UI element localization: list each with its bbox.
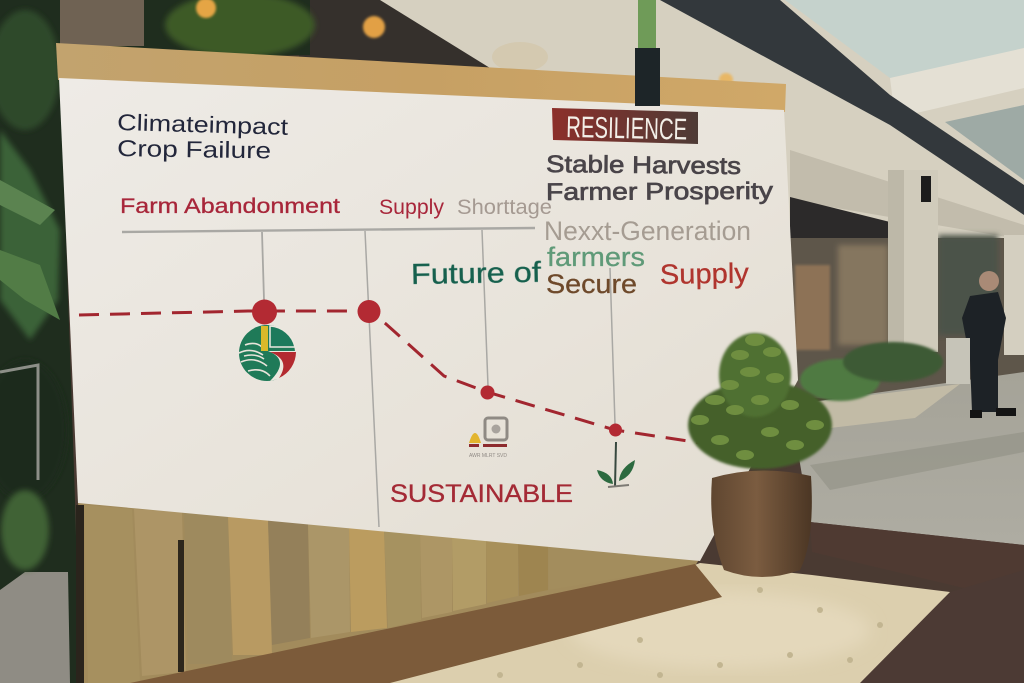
background shrubs bbox=[800, 338, 970, 401]
top wooden header plank bbox=[56, 43, 786, 112]
heading: future of: Future of bbox=[411, 257, 542, 291]
label: sustainable: SUSTAINABLE bbox=[390, 480, 573, 508]
label: farm abandonment and supply shortage: Farm Abandonment bbox=[120, 195, 340, 218]
rail and hanging bracket bbox=[635, 48, 660, 106]
banner: resilience: RESILIENCE bbox=[566, 111, 688, 147]
panel: white board bbox=[59, 78, 798, 561]
person in suit bbox=[962, 271, 1016, 418]
label: farm abandonment and supply shortage: Supply bbox=[379, 196, 444, 219]
icon: seed and sensor bbox=[469, 418, 507, 459]
planter stone pot bbox=[0, 490, 70, 683]
text: next-generation farmers, secure supply bbox=[544, 216, 751, 299]
chart: drop lines bbox=[122, 228, 615, 527]
chart: milestone dots bbox=[252, 300, 622, 436]
banner: resilience bbox=[552, 108, 698, 147]
text: next-generation farmers, secure supply: Nexxt-Generation bbox=[544, 216, 751, 246]
wooden plank base bbox=[76, 500, 722, 683]
text: stable harvests, farmer prosperity bbox=[546, 151, 773, 206]
text: next-generation farmers, secure supply: Supply bbox=[660, 257, 749, 290]
heading: climate impact bbox=[117, 109, 289, 163]
gravel bed bbox=[380, 563, 950, 683]
plant in terracotta pot bbox=[688, 333, 832, 577]
icon: sprout bbox=[597, 442, 635, 487]
label: farm abandonment and supply shortage bbox=[120, 195, 552, 219]
label: farm abandonment and supply shortage: Shorttage bbox=[457, 196, 552, 219]
heading: climate impact: Climateimpact bbox=[117, 109, 289, 140]
text: stable harvests, farmer prosperity: Farmer Prosperity bbox=[546, 178, 773, 206]
text: next-generation farmers, secure supply: Secure bbox=[546, 269, 637, 299]
heading: climate impact: Crop Failure bbox=[117, 135, 271, 163]
icon: farm pie emblem bbox=[239, 325, 296, 381]
chart: dashed decline line bbox=[79, 311, 708, 444]
text: stable harvests, farmer prosperity: Stable Harvests bbox=[546, 151, 741, 180]
text: next-generation farmers, secure supply: farmers bbox=[547, 242, 645, 272]
icon: seed and sensor: AWR MLRT SVD bbox=[469, 453, 507, 459]
